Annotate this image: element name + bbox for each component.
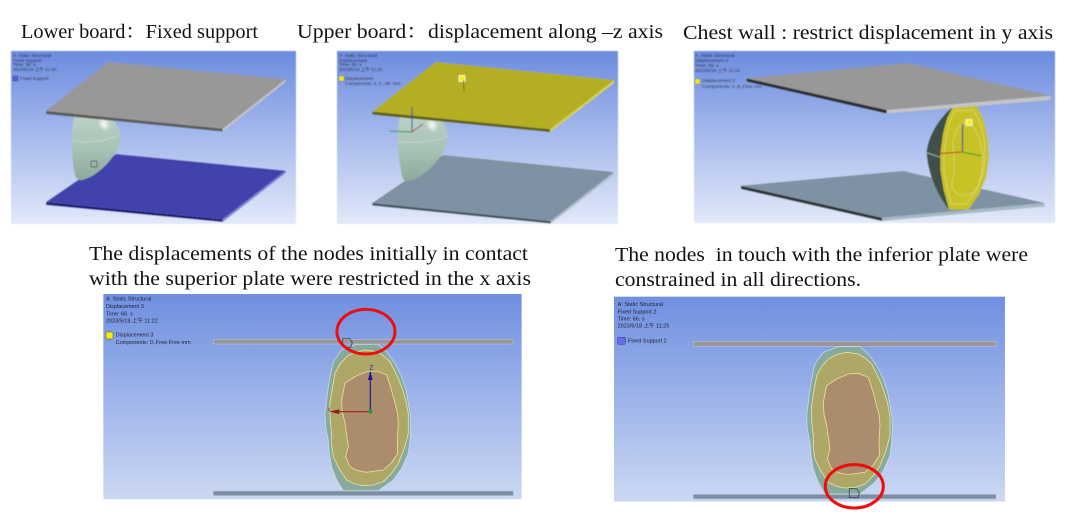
breast model: [398, 114, 448, 181]
panel caption: A: Static Structural: [13, 53, 51, 58]
breast cut section: [927, 106, 989, 210]
node marker: [343, 339, 352, 347]
panel caption: Displacement 2: [695, 58, 728, 64]
heading: superior plate nodes: [89, 243, 531, 290]
panel: lower board fixed support: [11, 51, 296, 224]
panel: upper board displacement: [337, 51, 618, 224]
panel caption: Time: 66. s: [13, 62, 36, 67]
callout: red ellipse: [337, 309, 395, 354]
heading: upper board: Upper board：displacement along –z axis: [297, 21, 663, 43]
lower plate: [693, 494, 996, 499]
panel caption: Time: 66. s: [695, 63, 719, 69]
panel caption: Fixed Support: [13, 58, 42, 63]
panel: inferior plate constraint: [614, 297, 1005, 508]
heading: inferior plate nodes: The nodes in touch with the inferior plate were: [615, 244, 1028, 266]
panel caption: [618, 302, 669, 344]
panel caption: Fixed Support: [20, 76, 49, 81]
panel caption: 2023/5/18 上午 11:25: [618, 322, 669, 330]
load marker: [966, 120, 972, 126]
lower plate: [741, 171, 1045, 221]
load marker: [459, 76, 465, 91]
upper plate: [213, 339, 513, 344]
panel caption: [339, 53, 401, 86]
panel caption: Components: 0.,Free,Free mm: [116, 340, 191, 346]
breast section: [325, 344, 411, 491]
upper plate: [46, 62, 286, 132]
panel caption: Components: 0.,0.,Free mm: [702, 84, 762, 90]
panel caption: 2023/5/18 上午 11:21: [695, 67, 741, 74]
panel caption: 2023/5/18 上午 11:20: [13, 66, 57, 73]
upper plate: [372, 62, 614, 132]
panel caption: Time: 66. s: [339, 62, 362, 67]
panel caption: Displacement: [345, 76, 374, 81]
panel caption: Displacement 3: [106, 304, 144, 310]
heading: superior plate nodes: with the superior plate were restricted in the x axis: [89, 268, 531, 290]
heading: chest wall: Chest wall : restrict displacement in y axis: [683, 22, 1053, 44]
breast model: [72, 114, 120, 180]
callout: red ellipse: [825, 465, 883, 508]
panel caption: Displacement 2: [702, 78, 735, 84]
heading: inferior plate nodes: constrained in all directions.: [615, 269, 861, 291]
heading: superior plate nodes: The displacements of the nodes initially in contact: [89, 243, 528, 265]
breast section: [807, 347, 892, 494]
panel caption: [13, 53, 57, 81]
panel caption: Displacement 3: [116, 333, 153, 339]
lower plate: [372, 155, 614, 224]
axis triad: [327, 365, 374, 414]
axis triad: Z: [370, 365, 374, 371]
lower plate: [46, 154, 286, 222]
heading: inferior plate nodes: [615, 244, 1028, 291]
panel caption: Fixed Support 2: [618, 309, 656, 315]
axis triad: [940, 124, 981, 156]
node marker: [849, 489, 859, 498]
heading: lower board: Lower board：Fixed support: [21, 21, 258, 43]
axis triad: [389, 107, 423, 132]
panel caption: [695, 53, 762, 90]
panel caption: Displacement: [339, 58, 368, 63]
axis triad: X: [327, 407, 331, 413]
panel caption: A: Static Structural: [339, 53, 377, 58]
upper plate: [693, 341, 996, 346]
panel caption: Components: 0.,0.,-85. mm: [345, 81, 401, 86]
panel caption: 2023/5/18 上午 11:21: [339, 66, 383, 73]
panel: superior plate restriction: [103, 294, 522, 499]
panel caption: A: Static Structural: [106, 297, 151, 303]
panel caption: A: Static Structural: [618, 302, 663, 308]
lower plate: [213, 491, 513, 496]
panel caption: Time: 66. s: [106, 311, 133, 317]
panel caption: [106, 297, 191, 346]
upper plate: [747, 63, 1051, 114]
panel: chest wall displacement: [694, 51, 1055, 223]
panel caption: 2023/5/18 上午 11:22: [106, 316, 158, 324]
panel caption: Fixed Support 2: [628, 338, 667, 344]
panel caption: Time: 66. s: [618, 317, 645, 323]
panel caption: A: Static Structural: [695, 53, 735, 59]
